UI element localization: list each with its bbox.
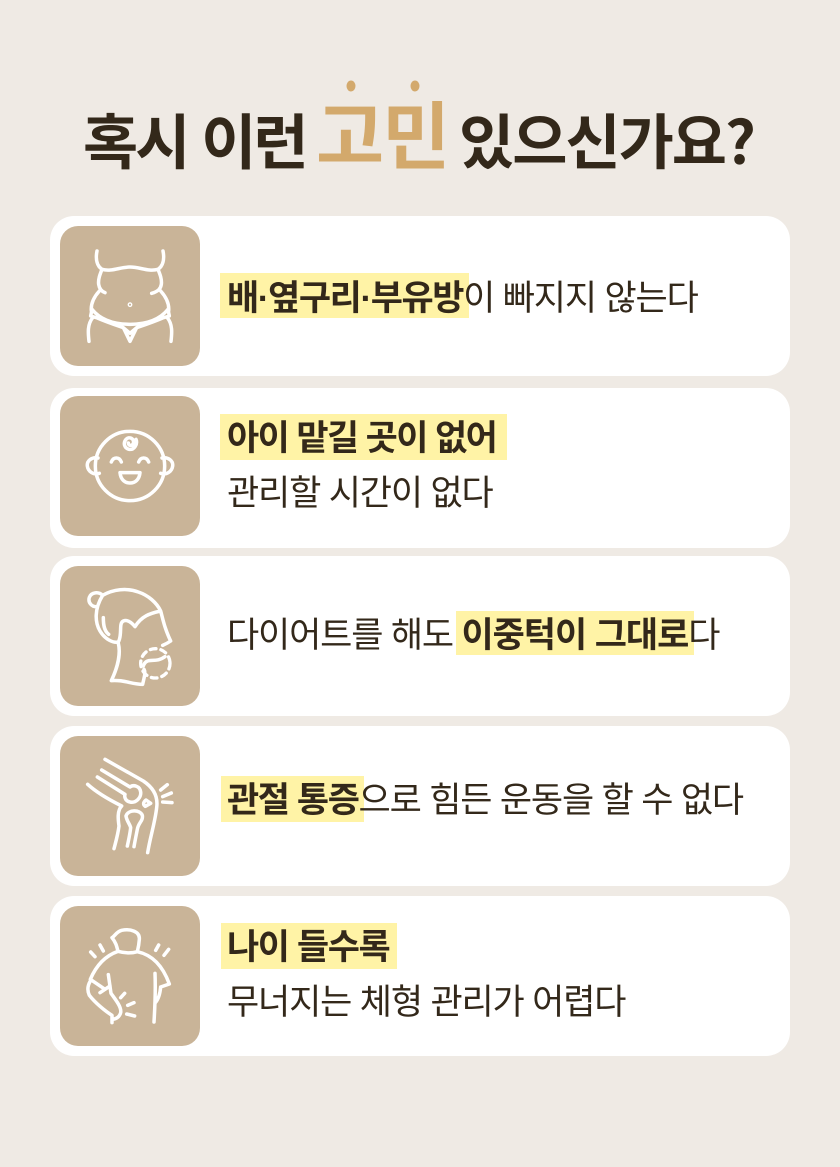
text: highlight xyxy=(221,776,364,822)
text: line 1: 배·옆구리·부유방이 빠지지 않는다 xyxy=(227,279,698,318)
title keyword: 고민 xyxy=(316,78,448,185)
text: line 1: 다이어트를 해도 이중턱이 그대로다 xyxy=(227,616,719,655)
icon: double chin profile xyxy=(60,566,200,706)
text: line 1 highlight xyxy=(220,273,469,318)
text: line 1 highlight xyxy=(221,923,397,969)
text: line 1: 관절 통증으로 힘든 운동을 할 수 없다 xyxy=(227,781,743,820)
icon: belly xyxy=(60,226,200,366)
title text before keyword: 혹시 이런 xyxy=(83,95,306,182)
icon: knee joint xyxy=(60,736,200,876)
text: line 1: 아이 맡길 곳이 없어 xyxy=(227,419,496,458)
icon: back pain xyxy=(60,906,200,1046)
text: line 2: 무너지는 체형 관리가 어렵다 xyxy=(227,983,625,1022)
text: line 1: 나이 들수록 xyxy=(227,928,389,967)
panel: card 5 xyxy=(50,896,790,1056)
emphasis dots xyxy=(346,80,420,92)
title xyxy=(83,78,754,185)
panel: card 4 xyxy=(50,726,790,886)
title text after keyword: 있으신가요? xyxy=(459,95,754,182)
text: line 1 highlight xyxy=(220,414,507,460)
text: highlight xyxy=(456,611,694,655)
text: line 2: 관리할 시간이 없다 xyxy=(227,474,493,513)
panel: card 3 xyxy=(50,556,790,716)
panel: card 2 xyxy=(50,388,790,548)
icon: baby face xyxy=(60,396,200,536)
panel: card 1 xyxy=(50,216,790,376)
